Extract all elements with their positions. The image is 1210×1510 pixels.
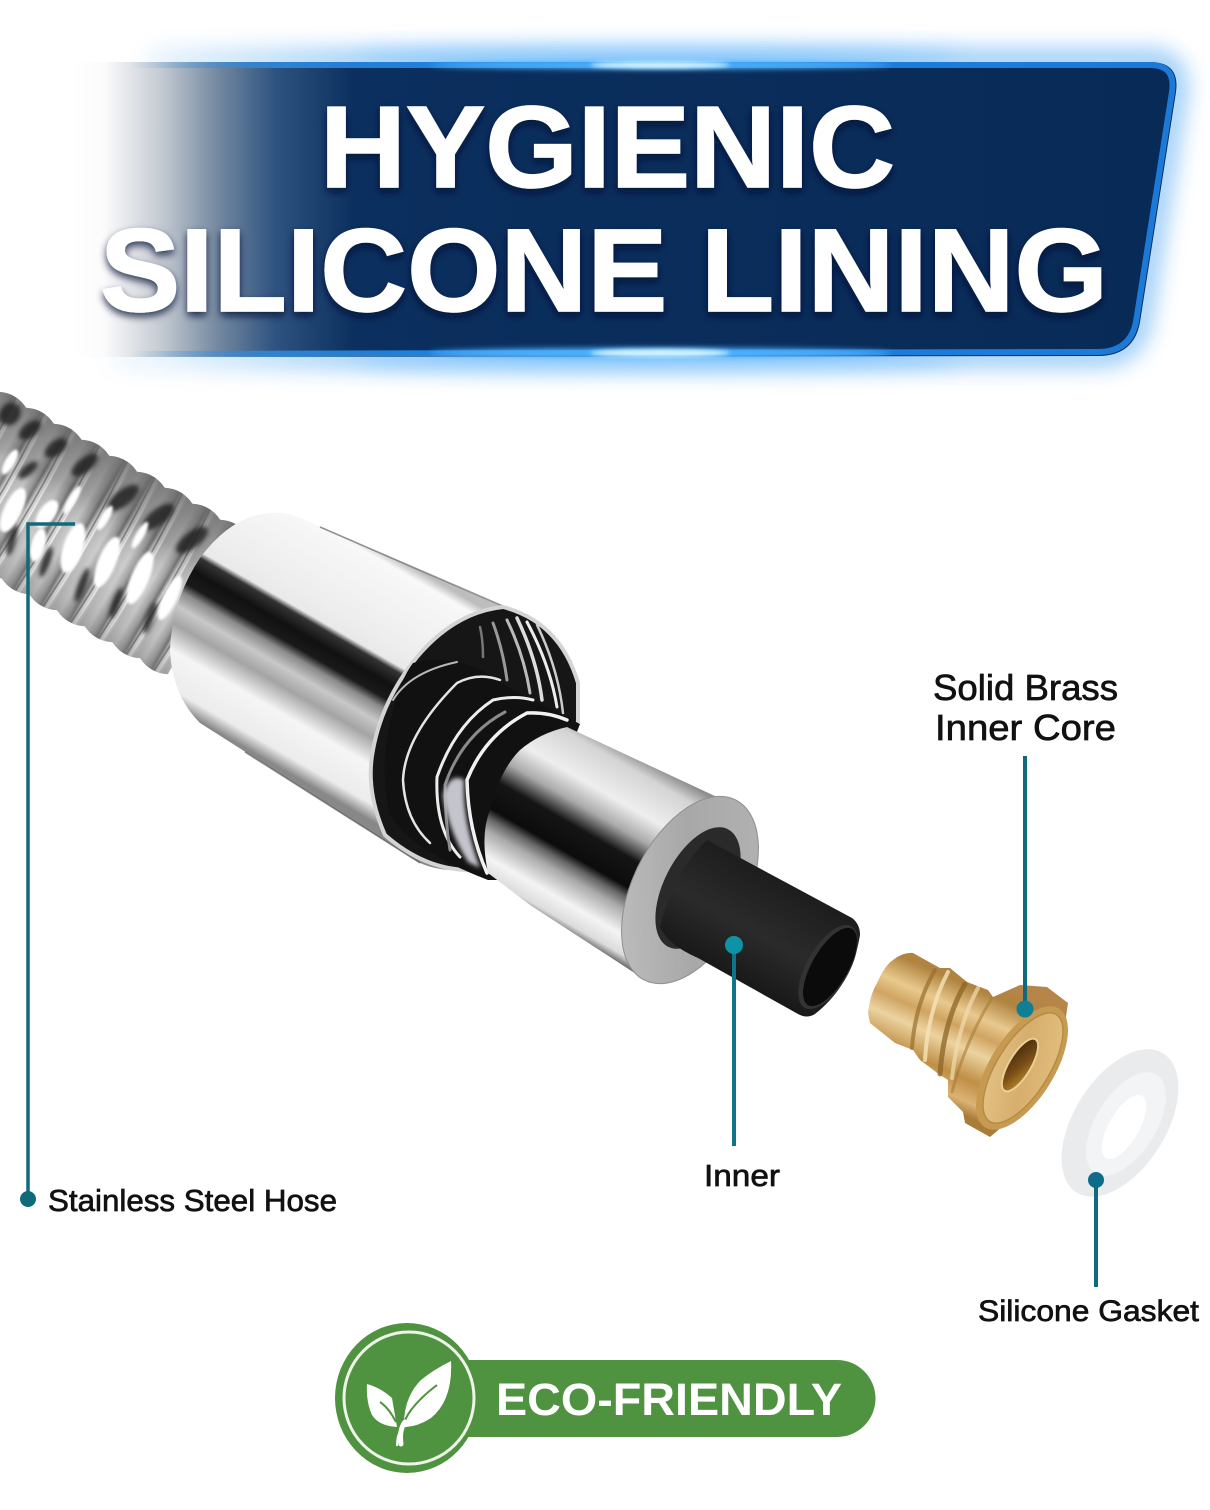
- banner blue edge: [100, 65, 1173, 354]
- sleeve inner thread: [480, 618, 563, 713]
- callout: inner: Inner: [704, 1158, 780, 1193]
- badge circle: [335, 1323, 479, 1473]
- inner corrugated neck: [384, 660, 580, 880]
- banner outer glow: [110, 50, 1176, 368]
- chrome sleeve: [170, 513, 580, 880]
- banner panel: [75, 62, 1176, 357]
- callout: silicone gasket: [978, 1172, 1200, 1328]
- title text: [100, 82, 1108, 337]
- badge pill: [411, 1360, 876, 1437]
- brass ribs: [912, 970, 992, 1092]
- sleeve opening rim: [371, 607, 578, 870]
- callout: silicone gasket: Silicone Gasket: [978, 1295, 1200, 1328]
- brass inner core: [868, 953, 1086, 1144]
- title text: HYGIENIC: [320, 82, 895, 212]
- banner highlights: [430, 61, 890, 358]
- eco-friendly badge: [335, 1323, 876, 1473]
- brass flange face: [958, 992, 1086, 1144]
- brass bore: [995, 1034, 1045, 1096]
- badge text: ECO-FRIENDLY: [496, 1374, 842, 1425]
- neck bright band: [443, 778, 480, 868]
- callout: solid brass inner core: Solid Brass: [933, 667, 1118, 708]
- title text: SILICONE LINING: [100, 205, 1108, 337]
- callout: solid brass inner core: Inner Core: [935, 707, 1116, 748]
- sleeve edge lines: [245, 527, 505, 863]
- callout: inner: [704, 936, 780, 1193]
- chrome inner tube: [484, 727, 870, 1018]
- stainless steel corrugated hose: [0, 392, 236, 674]
- black inner lining tube: [660, 840, 870, 1018]
- gray silicone ring: [593, 774, 787, 1006]
- callout: stainless steel hose: [20, 524, 337, 1218]
- callout: stainless steel hose: Stainless Steel Hose: [48, 1183, 337, 1218]
- title banner: [75, 50, 1176, 368]
- white silicone gasket: [1038, 1029, 1202, 1217]
- callout: solid brass inner core: [933, 667, 1118, 1018]
- icon: leaf sprout: [367, 1361, 451, 1447]
